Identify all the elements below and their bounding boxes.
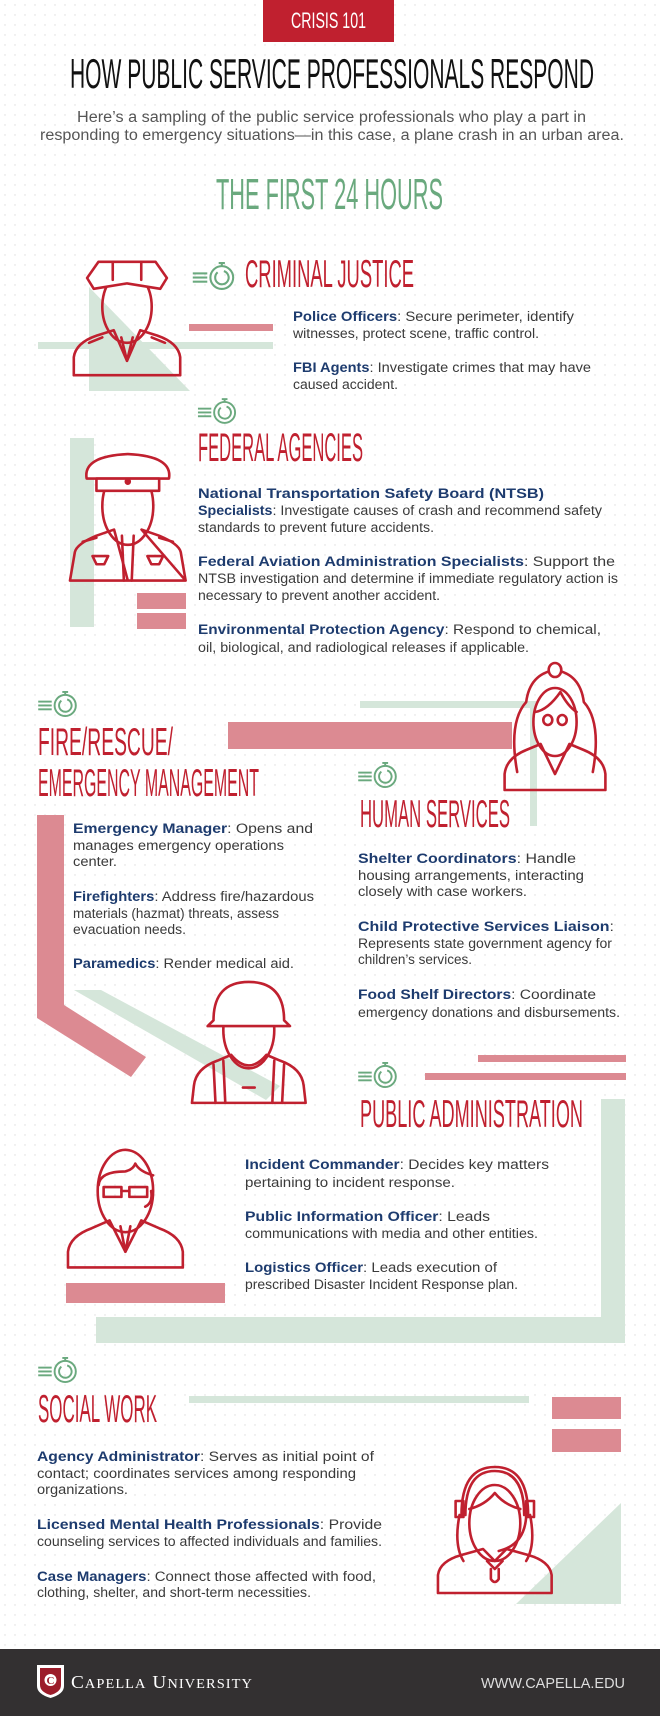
url: WWW.CAPELLA.EDU [481, 1675, 625, 1692]
text: human services roles: Represents state government agency for [358, 936, 613, 951]
heading: fire/rescue/emergency management: FIRE/RESCUE/ [38, 721, 173, 764]
text: criminal justice roles: FBI Agents : Investigate crimes that may have [293, 360, 591, 375]
subtitle [40, 109, 624, 144]
icon: stopwatch [198, 399, 235, 423]
text: federal agencies roles: standards to prevent future accidents. [198, 520, 434, 535]
panel: federal agencies [70, 399, 618, 655]
icon: federal officer [70, 454, 186, 581]
text: social work roles: organizations. [37, 1482, 128, 1497]
text: human services roles: Shelter Coordinators : Handle [358, 851, 576, 866]
text: public administration roles: prescribed Disaster Incident Response plan. [245, 1277, 518, 1292]
icon: woman with headset [438, 1467, 552, 1593]
text: social work roles: contact; coordinates services among responding [37, 1466, 356, 1481]
text: fire/rescue roles: materials (hazmat) threats, assess [73, 906, 279, 921]
text: fire/rescue roles: Paramedics : Render medical aid. [73, 956, 294, 971]
icon: stopwatch [358, 763, 396, 787]
icon: stopwatch [38, 692, 76, 716]
panel: criminal justice: CRIMINAL JUSTICE [245, 253, 414, 296]
text: public administration roles [245, 1157, 549, 1292]
text: federal agencies roles: NTSB investigation and determine if immediate regulatory action is [198, 571, 618, 586]
text: criminal justice roles: witnesses, protect scene, traffic control. [292, 326, 539, 341]
text: human services roles: children’s services. [358, 952, 472, 967]
panel: public administration [66, 1055, 626, 1343]
text: social work roles: clothing, shelter, and short-term necessities. [37, 1585, 311, 1600]
subtitle: Here’s a sampling of the public service professionals who play a part in [77, 109, 586, 126]
text: human services roles [358, 851, 620, 1020]
icon: stopwatch [358, 1063, 396, 1087]
icon: police officer [74, 262, 180, 375]
text: social work roles: Agency Administrator : Serves as initial point of [37, 1449, 374, 1464]
text: social work roles: Case Managers : Connect those affected with food, [37, 1569, 376, 1584]
panel: human services [358, 663, 620, 1020]
text: human services roles: housing arrangements, interacting [358, 868, 584, 883]
icon: capella shield: C [47, 1675, 55, 1687]
panel: social work [37, 1358, 621, 1604]
icon: woman with glasses [505, 663, 605, 790]
text: federal agencies roles: National Transportation Safety Board (NTSB) [198, 486, 544, 501]
text: public administration roles: communications with media and other entities. [245, 1226, 538, 1241]
text: human services roles: emergency donations and disbursements. [358, 1005, 620, 1020]
text: human services roles: Child Protective Services Liaison : [358, 919, 614, 934]
panel: fire/rescue/emergency management: EMERGENCY MANAGEMENT [38, 762, 259, 805]
text: criminal justice roles: caused accident. [293, 377, 398, 392]
panel: federal agencies: FEDERAL AGENCIES [198, 426, 363, 470]
icon: man with glasses [68, 1150, 183, 1267]
text: public administration roles: Public Information Officer : Leads [245, 1209, 490, 1224]
text: fire/rescue roles: manages emergency operations [73, 838, 284, 853]
text: public administration roles: pertaining to incident response. [245, 1175, 455, 1190]
text: human services roles: closely with case workers. [358, 884, 527, 899]
text: federal agencies roles: oil, biological, and radiological releases if applicable. [198, 640, 529, 655]
heading: fire/rescue/emergency management [38, 721, 259, 805]
text: public administration roles: Logistics Officer : Leads execution of [245, 1260, 497, 1275]
badge: crisis 101: CRISIS 101 [291, 8, 366, 33]
text: federal agencies roles: necessary to prevent another accident. [198, 588, 440, 603]
text: federal agencies roles: Environmental Protection Agency : Respond to chemical, [198, 622, 601, 637]
panel: criminal justice [38, 253, 591, 392]
text: fire/rescue roles [73, 821, 314, 971]
text: social work roles: counseling services to affected individuals and families. [37, 1534, 382, 1549]
text: human services roles: Food Shelf Directors : Coordinate [358, 987, 596, 1002]
icon: stopwatch [38, 1358, 76, 1382]
text: fire/rescue roles: evacuation needs. [73, 922, 186, 937]
text: criminal justice roles: Police Officers : Secure perimeter, identify [293, 309, 574, 324]
text: criminal justice roles [292, 309, 591, 392]
icon: firefighter [192, 982, 306, 1103]
subtitle: responding to emergency situations—in this case, a plane crash in an urban area. [40, 127, 624, 144]
icon: stopwatch [193, 263, 233, 289]
panel: social work: SOCIAL WORK [38, 1388, 157, 1431]
text: fire/rescue roles: Firefighters : Address fire/hazardous [73, 889, 314, 904]
badge: crisis 101 [263, 0, 394, 42]
text: federal agencies roles [198, 486, 618, 655]
text: public administration roles: Incident Commander : Decides key matters [245, 1157, 549, 1172]
logo text: CAPELLA UNIVERSITY [71, 1672, 253, 1692]
text: social work roles: Licensed Mental Health Professionals : Provide [37, 1517, 382, 1532]
icon: capella shield [37, 1665, 64, 1698]
panel: fire/rescue/emergency management [37, 692, 512, 1103]
text: fire/rescue roles: Emergency Manager : Opens and [73, 821, 313, 836]
text: federal agencies roles: Federal Aviation Administration Specialists : Support the [198, 554, 615, 569]
text: fire/rescue roles: center. [73, 854, 117, 869]
text: social work roles [37, 1449, 382, 1600]
footer [0, 1649, 660, 1716]
text: federal agencies roles: Specialists : Investigate causes of crash and recommend safety [198, 503, 602, 518]
